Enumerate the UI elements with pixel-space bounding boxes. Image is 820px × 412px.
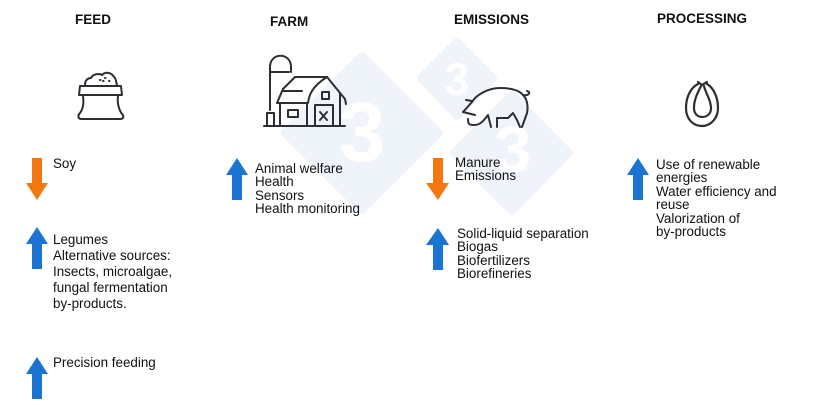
text: farm list: Health — [255, 174, 294, 189]
heading: processing: PROCESSING — [657, 11, 747, 26]
text: emissions solutions: Biogas — [457, 239, 498, 254]
text: precision feeding: Precision feeding — [53, 355, 156, 370]
heading: emissions: EMISSIONS — [454, 12, 529, 27]
arrow: precision feeding up — [26, 357, 48, 399]
arrow: manure down — [426, 158, 449, 200]
arrow: farm up — [226, 158, 248, 200]
arrow: emissions solutions up — [426, 228, 449, 270]
text: emissions solutions: Biofertilizers — [457, 253, 530, 268]
text: processing list: Use of renewable — [656, 157, 760, 172]
text: processing list: reuse — [656, 197, 690, 212]
text: emissions solutions — [457, 226, 589, 281]
text: legumes and alternative sources: Legumes — [53, 232, 108, 247]
text: processing list — [656, 157, 777, 239]
text: soy: Soy — [53, 156, 76, 171]
text: processing list: energies — [656, 170, 708, 185]
icon: feed sack — [78, 73, 123, 119]
watermark diamonds — [285, 42, 569, 211]
watermark diamonds: 3 — [495, 112, 531, 186]
text: legumes and alternative sources: by-products. — [53, 296, 127, 311]
arrow: legumes up — [26, 227, 48, 269]
icon: barn and silo — [264, 56, 346, 126]
text: farm list — [255, 161, 360, 216]
icon: sausage — [686, 82, 718, 126]
text: legumes and alternative sources: fungal fermentation — [53, 280, 168, 295]
text: legumes and alternative sources — [53, 232, 172, 311]
text: processing list: Valorization of — [656, 211, 740, 226]
text: manure and emissions: Emissions — [455, 168, 516, 183]
text: legumes and alternative sources: Alternative sources: — [53, 248, 171, 263]
text: manure and emissions — [455, 155, 516, 183]
text: farm list: Health monitoring — [255, 201, 360, 216]
text: manure and emissions: Manure — [455, 155, 500, 170]
watermark diamonds: 3 — [339, 85, 385, 179]
text: processing list: Water efficiency and — [656, 184, 777, 199]
icon: pig — [463, 88, 529, 127]
heading: feed: FEED — [75, 12, 111, 27]
text: processing list: by-products — [656, 224, 726, 239]
text: farm list: Animal welfare — [255, 161, 343, 176]
watermark diamonds: 3 — [444, 54, 470, 105]
heading: farm: FARM — [270, 14, 308, 29]
text: emissions solutions: Biorefineries — [457, 266, 532, 281]
arrow: soy down — [26, 158, 48, 200]
text: legumes and alternative sources: Insects, microalgae, — [53, 264, 172, 279]
arrow: processing up — [627, 158, 649, 200]
text: emissions solutions: Solid-liquid separation — [457, 226, 589, 241]
text: farm list: Sensors — [255, 188, 304, 203]
